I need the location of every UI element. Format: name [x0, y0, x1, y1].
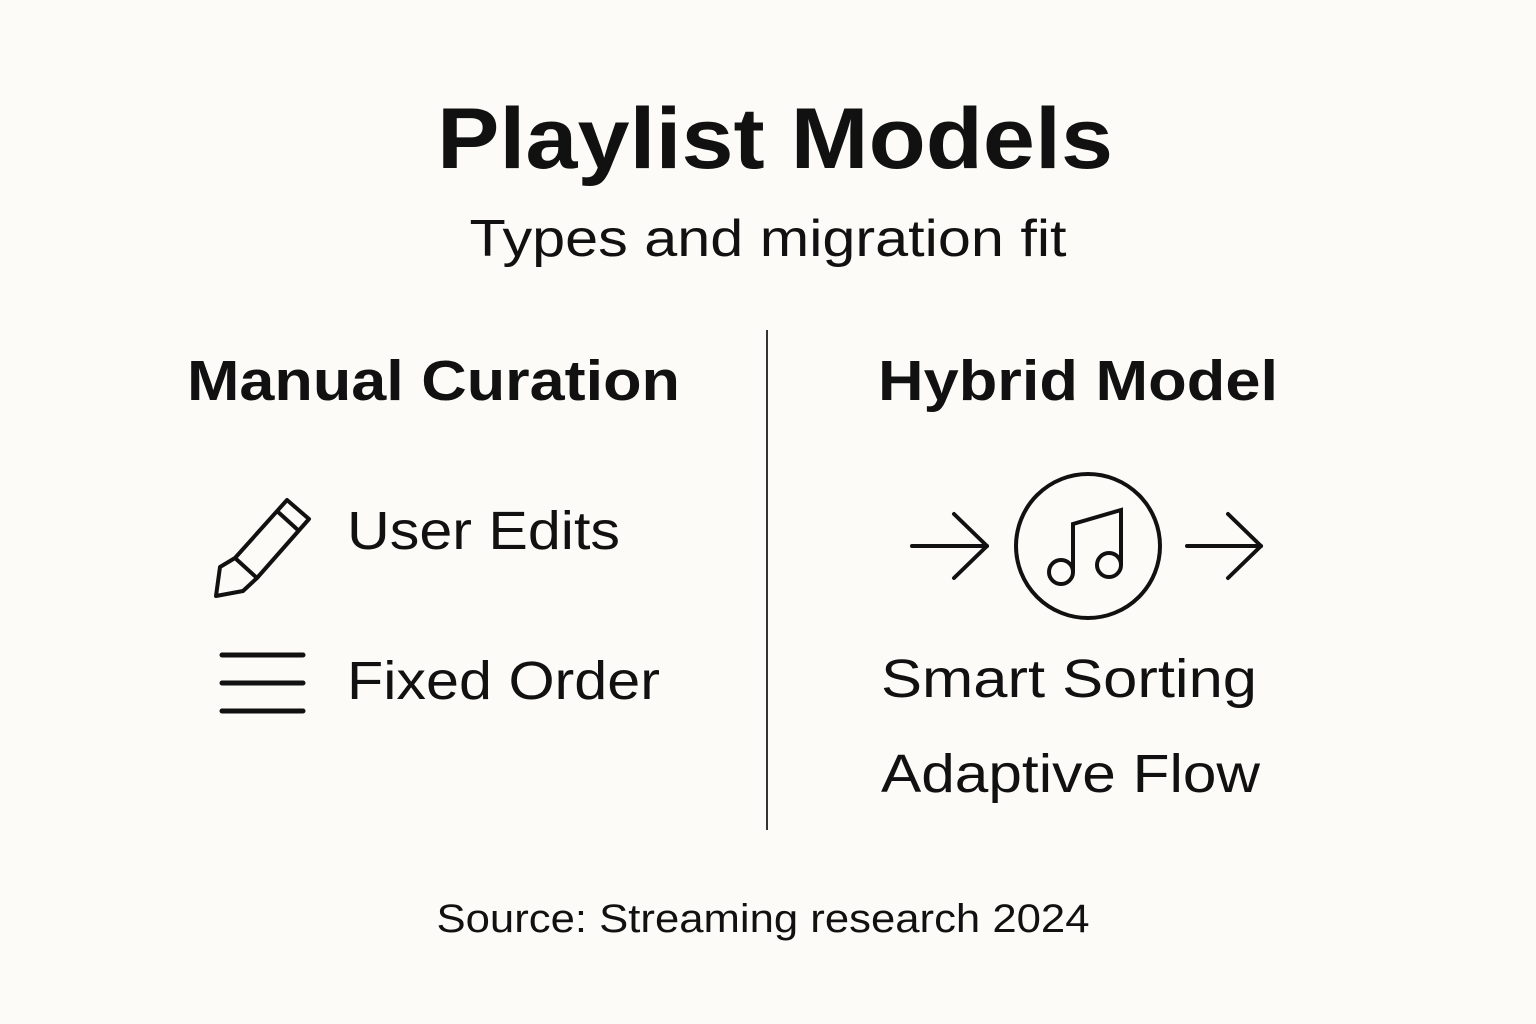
- heading: Hybrid Model: Hybrid Model: [878, 349, 1278, 413]
- text: User Edits: User Edits: [347, 501, 620, 561]
- panel: manual curation: [187, 349, 680, 711]
- subtitle: Types and migration fit: [470, 210, 1067, 268]
- source note: Source: Streaming research 2024: [436, 897, 1090, 941]
- text: Smart Sorting: Smart Sorting: [881, 649, 1257, 709]
- title: Playlist Models: [437, 91, 1113, 187]
- icon: list lines: [222, 655, 303, 711]
- panel: hybrid model: [878, 349, 1278, 804]
- icon: arrow out: [1187, 514, 1261, 578]
- icon: pencil: [216, 500, 309, 596]
- icon: music note circle: [1016, 474, 1160, 618]
- text: Fixed Order: Fixed Order: [347, 651, 660, 711]
- heading: Manual Curation: Manual Curation: [187, 349, 680, 413]
- icon: arrow in: [912, 514, 987, 578]
- text: Adaptive Flow: Adaptive Flow: [881, 744, 1261, 804]
